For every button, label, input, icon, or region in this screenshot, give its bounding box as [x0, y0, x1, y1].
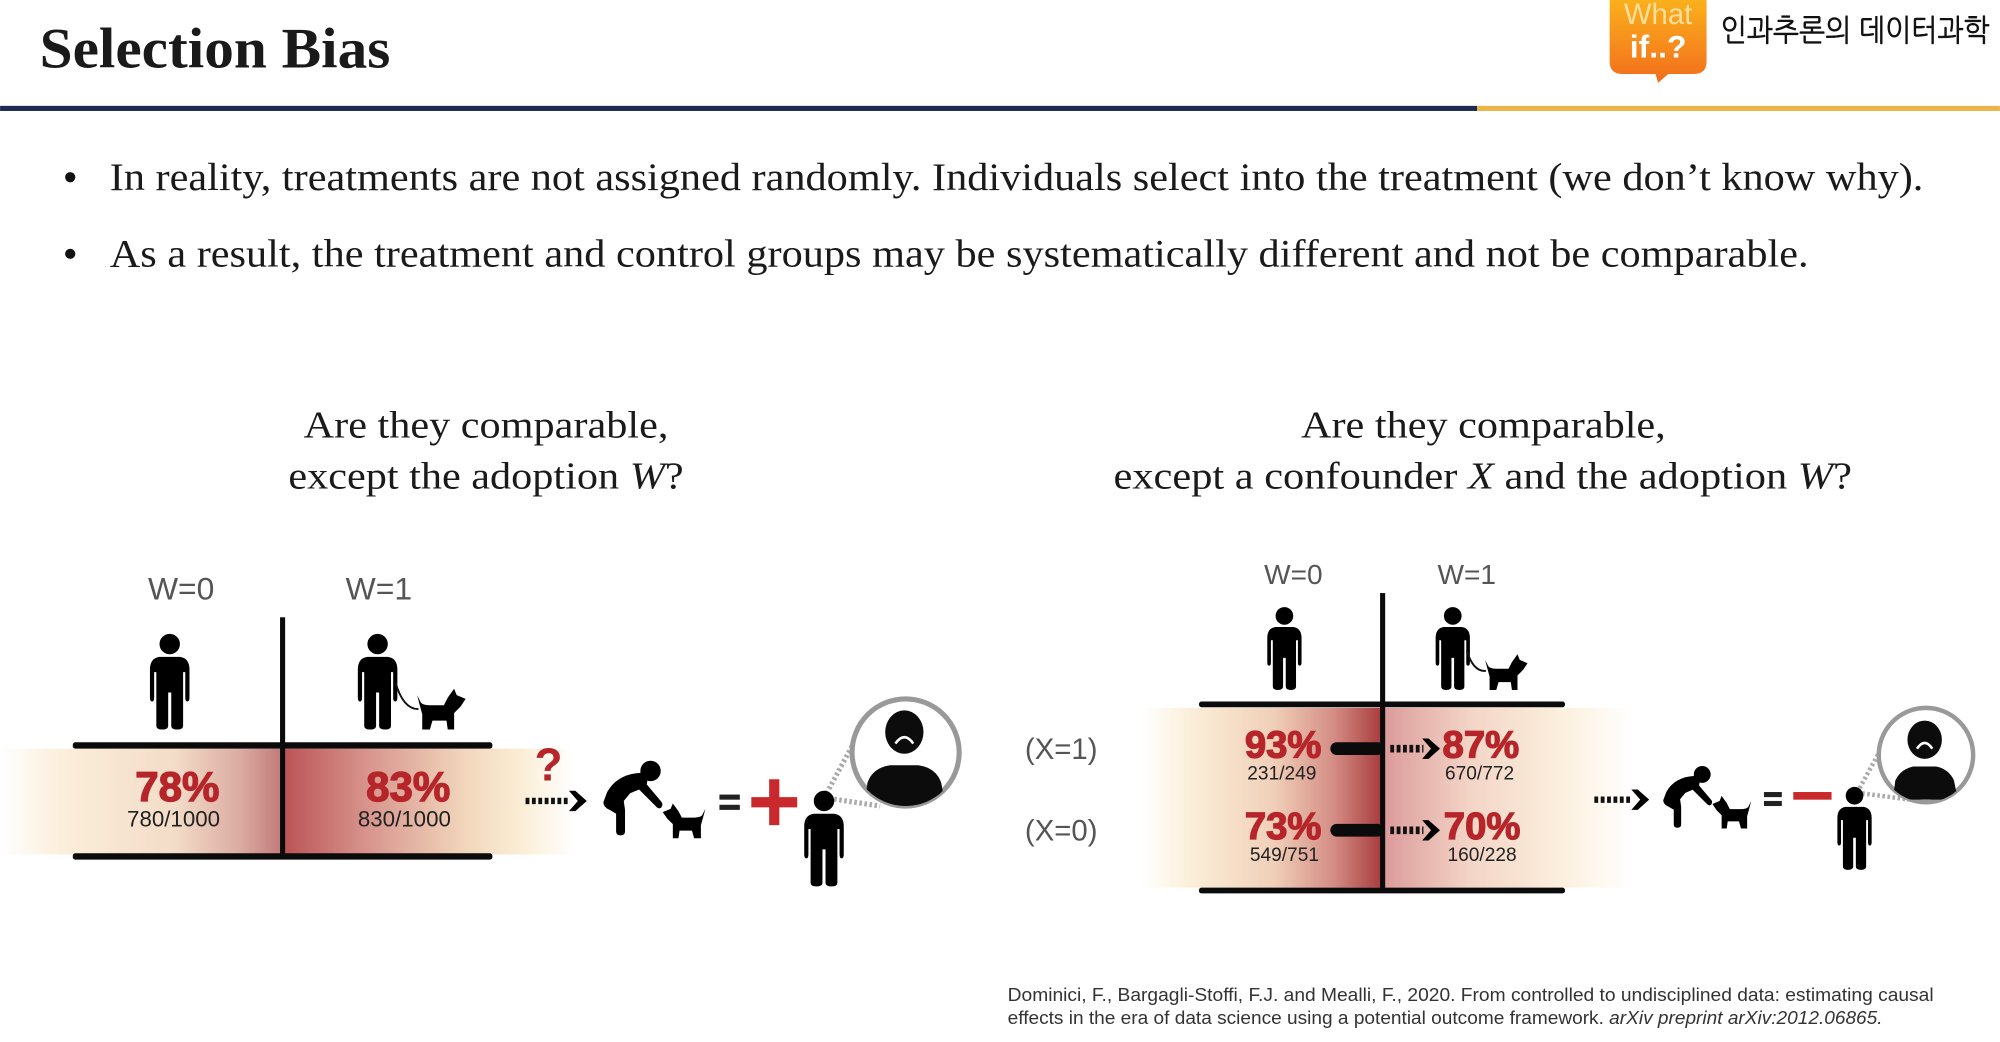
- table lines: [1199, 593, 1565, 893]
- bullet list: [65, 156, 1923, 276]
- citation: effects in the era of data science using a potential outcome framework. arXiv preprint arXiv:2012.06865.: [1008, 1007, 1883, 1028]
- stat: W=0: [127, 763, 220, 831]
- equals: [1764, 792, 1782, 806]
- equals: [719, 795, 740, 810]
- column labels: [148, 570, 412, 606]
- icon: person: [1267, 607, 1302, 690]
- stat: W=0: 780/1000: [127, 806, 220, 831]
- row labels: (X=1): [1025, 733, 1097, 766]
- panel: left table: [0, 570, 574, 860]
- stat: W=1: 83%: [366, 763, 450, 810]
- stat: X=1 W=0: 231/249: [1247, 763, 1316, 784]
- left heading: except the adoption W?: [288, 455, 684, 497]
- arrow: [1594, 789, 1649, 810]
- plus: [751, 779, 797, 825]
- stat: X=1 W=0: 93%: [1245, 724, 1321, 767]
- table lines: [73, 617, 492, 860]
- stat: W=1: [358, 763, 451, 831]
- icon: person with dog: [358, 634, 466, 730]
- icon: person with zoomed unhappy face: [804, 699, 959, 886]
- icon: person with dog: [1436, 607, 1528, 690]
- citation: Dominici, F., Bargagli-Stoffi, F.J. and Mealli, F., 2020. From controlled to undisciplined data: estimating causal: [1008, 984, 1934, 1005]
- question mark: ?: [534, 739, 563, 791]
- bullet list: As a result, the treatment and control groups may be systematically different and not be comparable.: [110, 233, 1809, 276]
- right heading: [1114, 404, 1852, 497]
- column labels: W=1: [346, 570, 412, 606]
- arrow: X=1: [1330, 738, 1440, 759]
- stat: X=0 W=1: 160/228: [1448, 845, 1517, 866]
- column labels: W=1: [1438, 559, 1496, 590]
- row labels: (X=0): [1025, 814, 1097, 847]
- stat: X=0 W=0: 73%: [1245, 805, 1321, 848]
- row labels: [1025, 733, 1097, 847]
- column labels: [1264, 559, 1496, 590]
- logo: What if..?: if..?: [1630, 28, 1686, 64]
- band gradient: [1142, 708, 1633, 888]
- panel: right table: [1025, 559, 1633, 893]
- right heading: Are they comparable,: [1301, 404, 1666, 446]
- icon: person: [150, 634, 189, 730]
- logo: What if..?: [1610, 0, 1707, 83]
- stat: X=1 W=1: 670/772: [1445, 763, 1514, 784]
- icon: person with zoomed unhappy face: [1837, 708, 1973, 870]
- stat: W=1: 830/1000: [358, 806, 451, 831]
- stat: X=1 W=1: 87%: [1443, 724, 1519, 767]
- left heading: [288, 404, 684, 497]
- title: Selection Bias: [40, 18, 390, 81]
- column labels: W=0: [1264, 559, 1323, 590]
- arrow: [526, 791, 587, 811]
- stat: X=0 W=1: 70%: [1444, 805, 1520, 848]
- icon: person petting dog: [1663, 766, 1751, 828]
- header rule: [0, 106, 2000, 111]
- icon: person petting dog: [603, 761, 705, 838]
- bullet list: In reality, treatments are not assigned randomly. Individuals select into the treatment (we don’t know why).: [110, 156, 1923, 199]
- right heading: except a confounder X and the adoption W?: [1114, 455, 1852, 497]
- minus: [1793, 792, 1832, 800]
- citation: [1008, 984, 1934, 1028]
- stat: X=0 W=0: 549/751: [1250, 845, 1319, 866]
- column labels: W=0: [148, 570, 214, 606]
- stat: W=0: 78%: [135, 763, 219, 810]
- arrow: X=0: [1330, 820, 1440, 840]
- band gradient: [0, 749, 574, 855]
- left heading: Are they comparable,: [304, 404, 668, 446]
